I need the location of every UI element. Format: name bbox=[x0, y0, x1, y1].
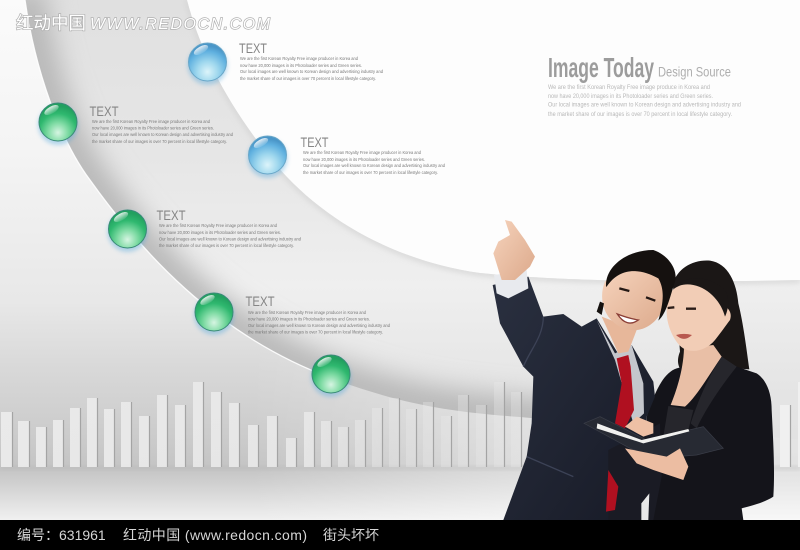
notebook cover bbox=[584, 417, 723, 458]
man smile and eyes bbox=[617, 314, 638, 323]
item 5: green ball with text bbox=[194, 293, 390, 335]
item 4: green ball with text: TEXT bbox=[156, 207, 186, 223]
item 1: blue ball with text: TEXT bbox=[239, 40, 267, 56]
man trouser gap bbox=[641, 493, 649, 520]
item 4: green ball with text: now have 20,000 images in its Photoloader series and Green series. bbox=[159, 230, 281, 235]
item 5: green ball with text: Our local images are well known to Korean design and advertising industry and bbox=[248, 323, 390, 328]
title block: Image Today: Design Source bbox=[658, 64, 731, 80]
photo: notebook and hands bbox=[584, 417, 723, 480]
man face bbox=[602, 270, 667, 330]
item 5: green ball with text: TEXT bbox=[246, 293, 275, 309]
footer bar: 街头坏坏 bbox=[323, 527, 379, 543]
footer bar bbox=[0, 520, 800, 550]
bar chart backdrop bbox=[0, 382, 800, 470]
man shirt bbox=[597, 320, 644, 423]
item 2: green ball with text bbox=[38, 103, 233, 145]
item 3: blue ball with text: Our local images are well known to Korean design and advertising industry and bbox=[303, 163, 445, 168]
item 3: blue ball with text: now have 20,000 images in its Photoloader series and Green series. bbox=[303, 157, 425, 162]
item 1: blue ball with text: the market share of our images is over 70 percent in local lifestyle category. bbox=[240, 76, 376, 81]
title block: Image Today bbox=[548, 52, 741, 118]
item 2: green ball with text: now have 20,000 images in its Photoloader series and Green series. bbox=[92, 126, 214, 130]
item 5: green ball with text: the market share of our images is over 70 percent in local lifestyle category. bbox=[248, 330, 383, 334]
man hair bbox=[606, 250, 676, 321]
footer bar: 编号：631961 bbox=[17, 527, 106, 543]
man hand pointing bbox=[493, 220, 535, 280]
photo: businesswoman bbox=[647, 261, 774, 520]
watermark: 红动中国 bbox=[16, 10, 86, 35]
title block: Image Today: the market share of our images is over 70 percent in local lifestyle category. bbox=[548, 111, 732, 118]
woman jacket bbox=[647, 357, 774, 520]
title block: Image Today: We are the first Korean Royalty Free image produce in Korea and bbox=[548, 84, 710, 91]
man tie bbox=[606, 355, 634, 512]
title block: Image Today: now have 20,000 images in its Photoloader series and Green series. bbox=[548, 93, 713, 100]
item 1: blue ball with text: now have 20,000 images in its Photoloader series and Green series. bbox=[240, 63, 362, 68]
item 3: blue ball with text: We are the first Korean Royalty Free image producer in Korea and bbox=[303, 150, 421, 155]
item 5: green ball with text: We are the first Korean Royalty Free image producer in Korea and bbox=[248, 310, 366, 315]
holding hand bbox=[625, 448, 688, 480]
item 1: blue ball with text bbox=[188, 40, 383, 85]
woman lapel bbox=[691, 357, 737, 428]
item 4: green ball with text: the market share of our images is over 70 percent in local lifestyle category. bbox=[159, 243, 294, 248]
watermark bbox=[16, 10, 271, 35]
man inner jacket shadow bbox=[608, 423, 662, 520]
item 2: green ball with text: Our local images are well known to Korean design and advertising industry and bbox=[92, 132, 233, 137]
green ball, end of curve bbox=[311, 355, 351, 397]
footer bar: 红动中国 (www.redocn.com) bbox=[123, 527, 307, 543]
item 3: blue ball with text: TEXT bbox=[300, 134, 329, 150]
man cuff bbox=[494, 270, 528, 298]
item 2: green ball with text: the market share of our images is over 70 percent in local lifestyle category. bbox=[92, 139, 227, 144]
item 5: green ball with text: now have 20,000 images in its Photoloader series and Green series. bbox=[248, 316, 370, 322]
notebook pages bbox=[597, 423, 689, 443]
man suit bbox=[493, 277, 655, 520]
item 4: green ball with text bbox=[108, 207, 301, 252]
item 1: blue ball with text: We are the first Korean Royalty Free image producer in Korea and bbox=[240, 56, 358, 61]
woman top bbox=[663, 406, 693, 437]
man sleeve crease bbox=[523, 317, 573, 477]
item 4: green ball with text: We are the first Korean Royalty Free image producer in Korea and bbox=[159, 223, 277, 228]
item 2: green ball with text: TEXT bbox=[90, 103, 119, 119]
curved grey band bbox=[25, 0, 800, 440]
item 4: green ball with text: Our local images are well known to Korean design and advertising industry and bbox=[159, 236, 301, 242]
watermark: WWW.REDOCN.COM bbox=[90, 16, 271, 33]
man neck bbox=[602, 317, 637, 353]
woman neck and chest bbox=[671, 345, 722, 407]
item 3: blue ball with text bbox=[248, 134, 445, 178]
woman face bbox=[667, 283, 731, 351]
woman eyes and lips bbox=[668, 307, 696, 309]
woman hair bbox=[673, 261, 749, 373]
item 3: blue ball with text: the market share of our images is over 70 percent in local lifestyle category. bbox=[303, 170, 438, 175]
photo: businessman bbox=[493, 220, 676, 520]
woman hair fringe bbox=[673, 278, 728, 317]
item 1: blue ball with text: Our local images are well known to Korean design and advertising industry and bbox=[240, 69, 383, 74]
title block: Image Today: Image Today bbox=[548, 52, 654, 83]
writing hand bbox=[625, 417, 653, 437]
title block: Image Today: Our local images are well known to Korean design and advertising industry and bbox=[548, 102, 741, 108]
item 2: green ball with text: We are the first Korean Royalty Free image producer in Korea and bbox=[92, 119, 210, 124]
